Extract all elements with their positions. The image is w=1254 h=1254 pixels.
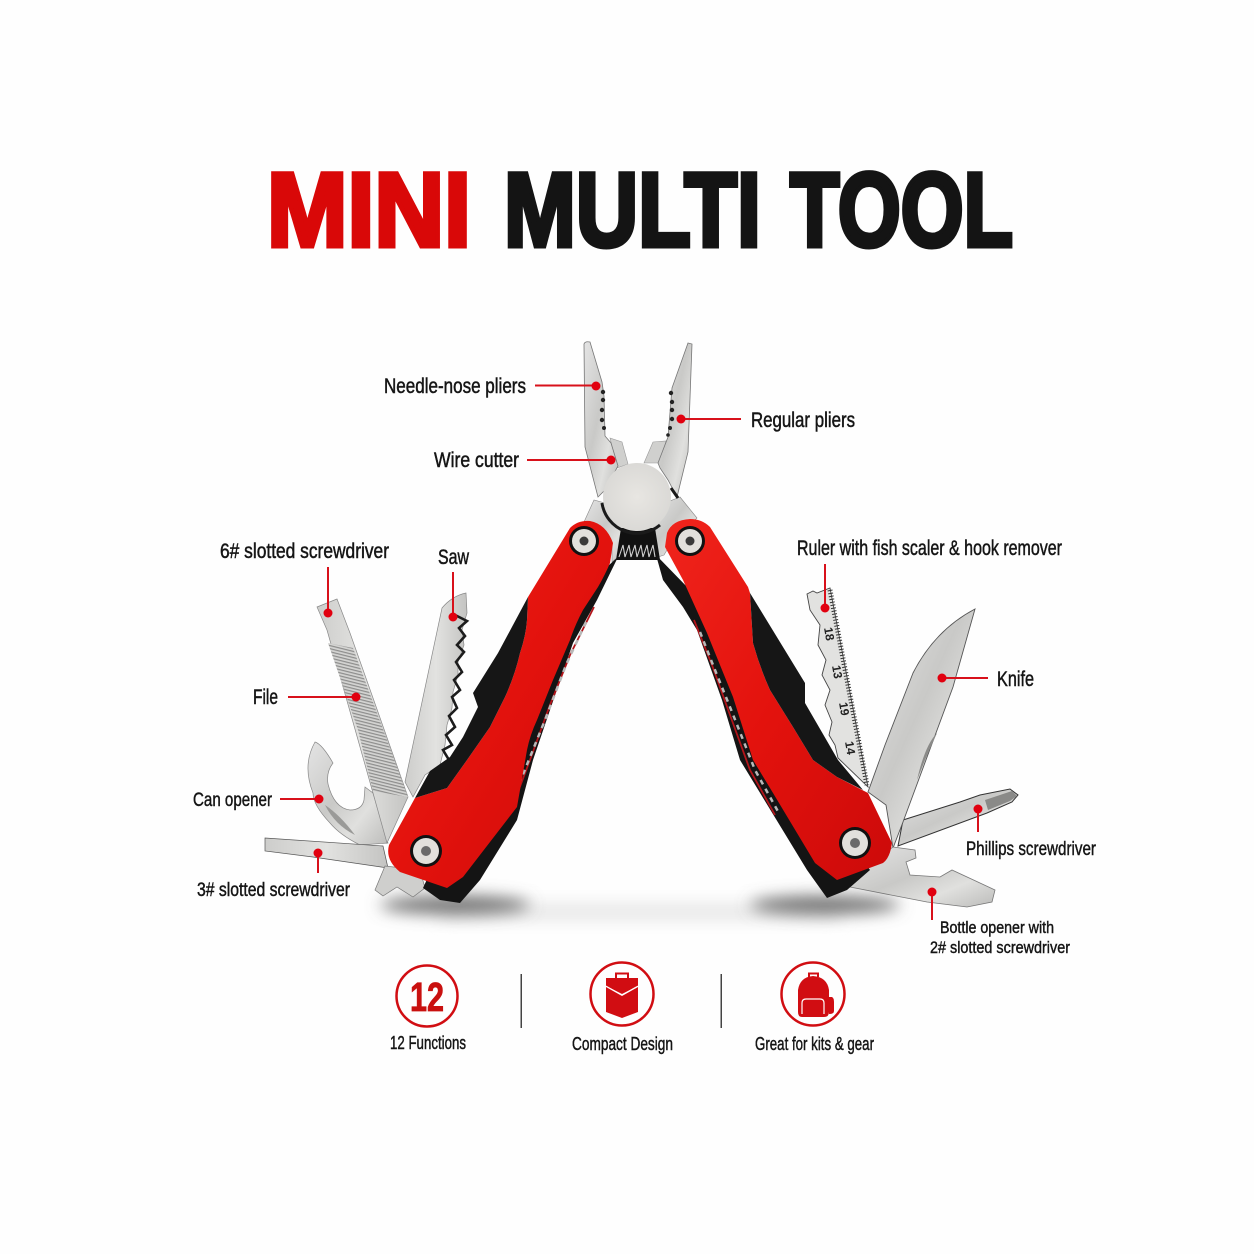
callout: phillips screwdriver bbox=[966, 804, 1097, 860]
callout: knife bbox=[938, 668, 1034, 691]
black insert bbox=[415, 597, 528, 798]
bottom screw bbox=[410, 835, 442, 867]
feature: compact design: Compact Design bbox=[572, 1034, 673, 1054]
red body bbox=[388, 521, 613, 888]
multi tool illustration bbox=[265, 342, 1018, 907]
3# slotted screwdriver bbox=[265, 838, 388, 868]
left handle bbox=[388, 521, 618, 903]
saw bbox=[405, 593, 467, 797]
callout: 3# slotted screwdriver bbox=[197, 848, 351, 901]
black insert bbox=[750, 593, 863, 790]
saw teeth bbox=[440, 615, 467, 766]
title: MULTI bbox=[504, 152, 761, 269]
back shell bbox=[656, 555, 870, 898]
ruler bbox=[807, 588, 868, 787]
ruler ticks bbox=[830, 590, 867, 785]
file and 6# slotted screwdriver bbox=[317, 599, 408, 843]
title bbox=[267, 152, 1013, 269]
callout: file: File bbox=[253, 686, 278, 709]
callout: wire cutter bbox=[434, 449, 616, 472]
pivot shadow arc bbox=[602, 488, 678, 533]
spring bbox=[616, 528, 660, 560]
callout: wire cutter: Wire cutter bbox=[434, 449, 519, 472]
regular plier jaw bbox=[658, 343, 692, 497]
right tools bbox=[807, 588, 1018, 907]
ground shadow bbox=[380, 896, 900, 920]
callout: 3# slotted screwdriver: 3# slotted screwdriver bbox=[197, 880, 351, 901]
divider bbox=[520, 974, 522, 1028]
phillips tip bbox=[985, 791, 1017, 810]
callout: file bbox=[253, 686, 360, 709]
callout: 6# slotted screwdriver bbox=[220, 540, 389, 618]
feature: great for kits and gear bbox=[755, 962, 874, 1054]
back shell bbox=[423, 557, 618, 903]
side accents bbox=[505, 622, 586, 815]
right handle bbox=[656, 519, 892, 898]
divider bbox=[720, 974, 722, 1028]
callout: phillips screwdriver: Phillips screwdriver bbox=[966, 839, 1097, 860]
file texture bbox=[328, 643, 408, 797]
knife nail nick bbox=[917, 733, 937, 780]
feature: great for kits and gear: Great for kits & gear bbox=[755, 1034, 874, 1054]
callout: needle-nose pliers: Needle-nose pliers bbox=[384, 375, 526, 398]
callout: bottle opener bbox=[928, 888, 1070, 957]
tangs bbox=[584, 497, 697, 562]
knife bbox=[868, 609, 975, 848]
ruler numbers: 18 bbox=[821, 626, 837, 642]
icon: number 12: 12 bbox=[410, 974, 444, 1020]
callout: bottle opener: 2# slotted screwdriver bbox=[930, 938, 1070, 957]
callout: regular pliers: Regular pliers bbox=[751, 409, 855, 432]
side red stripe bbox=[694, 620, 775, 815]
can opener slot bbox=[325, 805, 355, 835]
side red stripe bbox=[513, 607, 594, 805]
pivot disc bbox=[603, 463, 671, 531]
needle-nose plier jaw bbox=[584, 342, 618, 497]
feature: 12 functions bbox=[390, 966, 466, 1053]
callout: ruler: Ruler with fish scaler & hook remover bbox=[797, 537, 1062, 560]
callout: can opener: Can opener bbox=[193, 790, 273, 811]
icon: backpack bbox=[782, 962, 844, 1026]
bottom screw bbox=[839, 827, 871, 859]
feature: compact design bbox=[572, 962, 673, 1054]
callout: 6# slotted screwdriver: 6# slotted screwdriver bbox=[220, 540, 389, 563]
callout: bottle opener: Bottle opener with bbox=[940, 918, 1054, 937]
title: TOOL bbox=[790, 152, 1013, 269]
ruler numbers bbox=[821, 626, 858, 756]
callout: regular pliers bbox=[676, 409, 855, 432]
ruler numbers: 14 bbox=[842, 740, 858, 756]
top screw bbox=[675, 526, 705, 556]
red body bbox=[665, 519, 892, 880]
ruler numbers: 19 bbox=[836, 701, 852, 717]
callout: saw bbox=[438, 546, 470, 622]
callout: saw: Saw bbox=[438, 546, 470, 569]
top screw bbox=[569, 526, 599, 556]
can opener bbox=[308, 742, 388, 845]
icon: compact bag bbox=[590, 962, 654, 1026]
ruler numbers: 13 bbox=[829, 664, 845, 680]
callout: knife: Knife bbox=[997, 668, 1034, 691]
callout: ruler bbox=[797, 537, 1062, 612]
jaw teeth bbox=[600, 390, 674, 437]
hook tool bbox=[375, 866, 425, 897]
pliers jaw stubs bbox=[610, 438, 666, 468]
bottle opener bbox=[850, 847, 995, 907]
phillips screwdriver bbox=[898, 789, 1018, 846]
side accents bbox=[700, 632, 780, 815]
left tools bbox=[265, 593, 467, 897]
feature: 12 functions: 12 Functions bbox=[390, 1033, 466, 1053]
title: MINI bbox=[267, 152, 471, 269]
